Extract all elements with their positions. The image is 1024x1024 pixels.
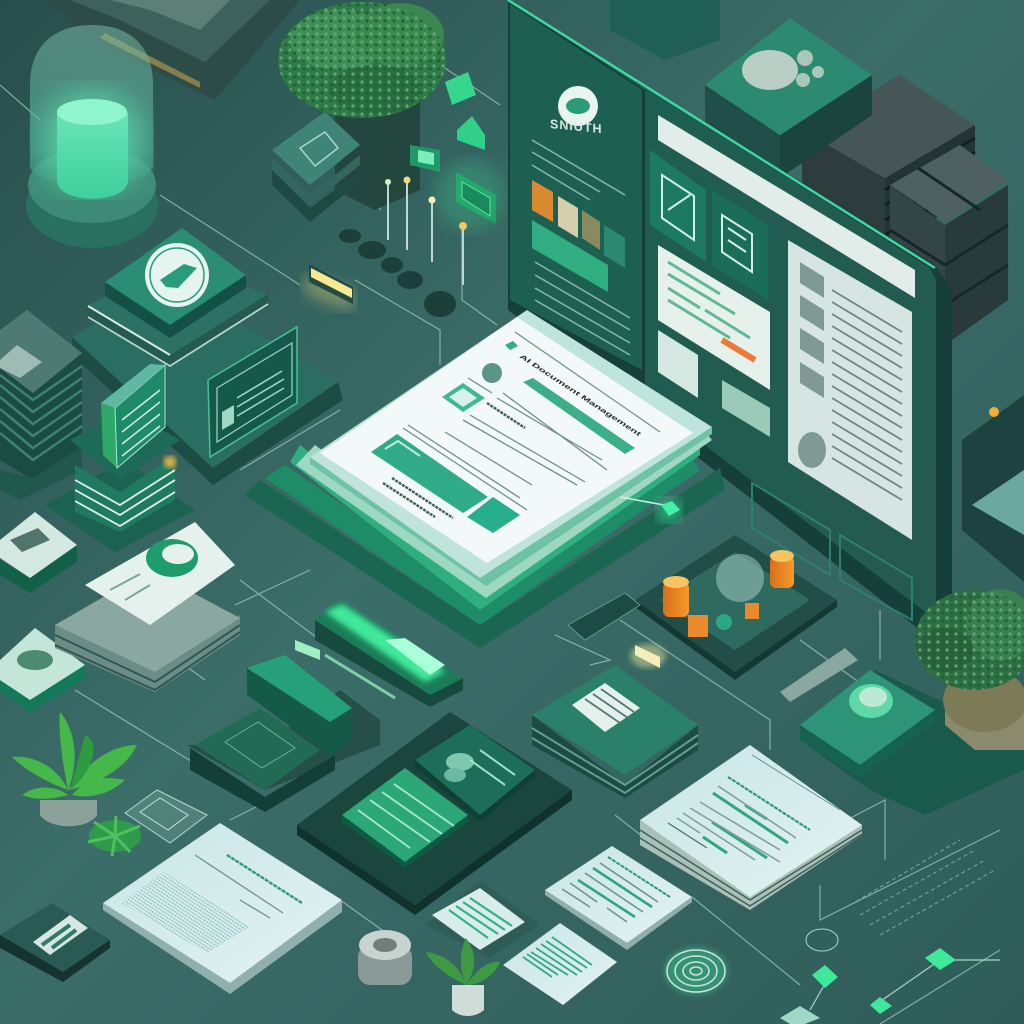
dense text block [122,872,250,953]
monitor body [508,0,952,630]
dark green card [415,725,535,822]
bottom right glowing nodes [780,929,1000,1024]
stack: green card and tiles [45,364,195,552]
icon: glowing yellow light bar [305,264,353,310]
card: tall article [788,240,912,540]
layer: outer dark tray [245,468,725,648]
stack: small tiles under tree [272,112,362,222]
monitor left panel: SNIUTH [550,117,602,136]
card: white chart card [658,245,770,390]
monitor lower panels [752,483,912,620]
icon: white circle badge [145,243,209,307]
vertical green card [101,364,165,468]
glowing green bar device [295,600,463,707]
icon: glowing glass jar [26,25,158,248]
plant: small fern [88,816,141,856]
icon: concentric circle [664,947,728,995]
green card [342,768,468,868]
card: left mint card two [0,628,85,712]
panel: server blocks [802,75,1008,345]
glass sphere [716,554,764,602]
card: image tile one [650,150,706,262]
icons: glowing green markers [410,72,505,230]
small text lines bottom right [850,840,995,935]
plant: bottom center fern with pot [426,938,500,1016]
panel: top right green box [610,0,872,178]
card: left mint card one [0,512,77,593]
dark card bottom left [0,903,110,982]
card: image tile two [712,190,768,300]
document card lower [503,923,617,1005]
stack: green with white card [532,665,698,798]
document stack right [640,745,862,910]
green box and slab [187,655,380,812]
icon: silver cylinder [358,930,412,985]
glass panel right [962,395,1024,582]
orange cylinder right [770,550,794,588]
small metal tool [780,648,858,702]
glass tile [125,790,207,843]
document card small [425,880,540,958]
document bottom left [103,823,342,994]
small dark tile [568,593,640,640]
plant: left fern [12,712,137,826]
right green base with device [800,670,1024,815]
tray with orange cylinders [635,535,837,680]
plant: right potted [915,589,1024,750]
orange cylinder left [663,576,689,617]
center stack layers [245,310,725,648]
monitor white header bar [658,115,915,298]
card: small white card [658,330,698,398]
plant: top tree [278,2,446,210]
monitor left panel [510,4,642,370]
dark tablet base with green cards [297,712,572,915]
monitor card [208,327,297,457]
icon: glowing white light [630,644,666,668]
card: small mint card [722,380,770,437]
document title: AI Document Management [518,353,643,437]
pins and small floor icons [339,176,467,317]
main document page [310,310,712,586]
stack: top left layered slabs [45,0,300,100]
stack: far left dark tiles [0,310,82,500]
document card [545,846,692,950]
panel: left green stack with circle [72,228,343,485]
stack: paper stack with green circle [55,522,240,692]
panel: large monitor [508,0,952,630]
connector with glowing node [620,497,681,522]
